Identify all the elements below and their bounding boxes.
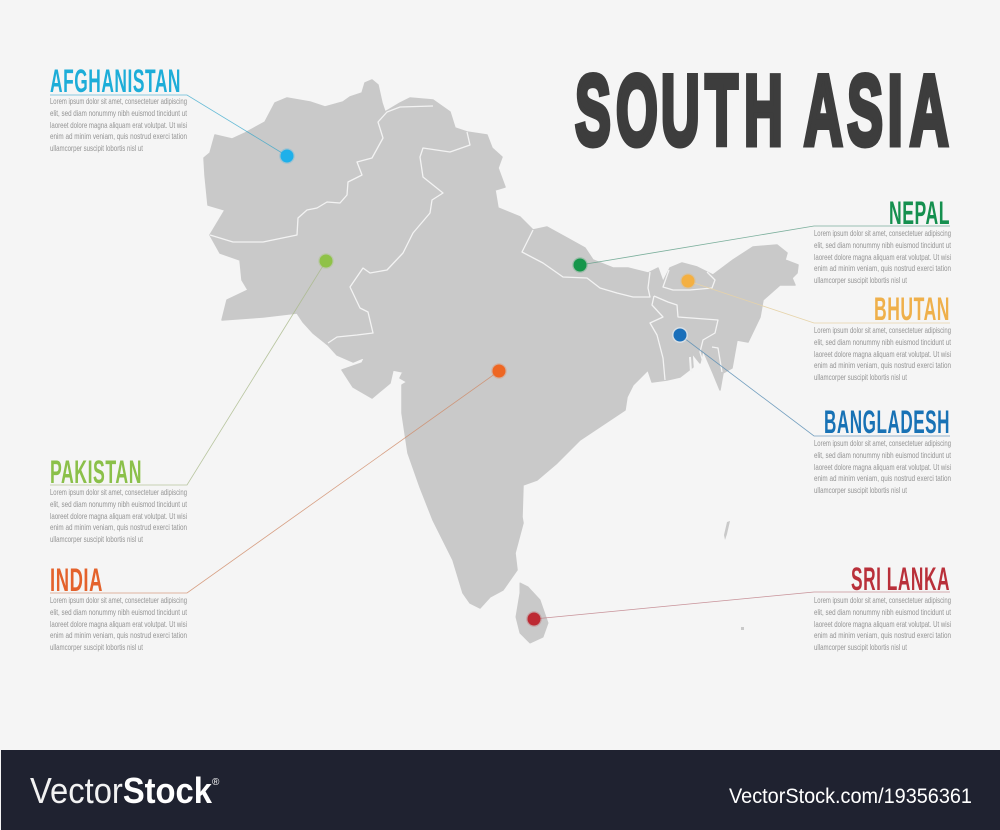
callout: Pakistan: Lorem ipsum dolor sit amet, consectetuer adipiscing: [50, 487, 187, 497]
footer logo: VectorStock: [30, 770, 213, 811]
island: Sri Lanka: [516, 583, 548, 643]
callout: India: ullamcorper suscipit lobortis nisl ut: [50, 642, 143, 652]
callout: Nepal: ullamcorper suscipit lobortis nisl ut: [814, 275, 907, 285]
callout: Nepal: enim ad minim veniam, quis nostrud exerci tation: [814, 263, 951, 273]
callout: Afghanistan: elit, sed diam nonummy nibh euismod tincidunt ut: [50, 108, 187, 118]
callout: Pakistan: PAKISTAN: [50, 454, 142, 490]
callout: India: [50, 364, 506, 652]
callout: Afghanistan: ullamcorper suscipit lobortis nisl ut: [50, 143, 143, 153]
callout: India: elit, sed diam nonummy nibh euismod tincidunt ut: [50, 607, 187, 617]
callout: Bhutan: enim ad minim veniam, quis nostrud exerci tation: [814, 360, 951, 370]
callout: Bhutan: ullamcorper suscipit lobortis nisl ut: [814, 372, 907, 382]
callout: Afghanistan: [50, 63, 294, 162]
registered mark: ®: [212, 777, 220, 788]
callout: Sri Lanka: [528, 561, 951, 652]
callout: Afghanistan: AFGHANISTAN: [50, 63, 181, 99]
islands: [724, 521, 744, 630]
callout: Afghanistan: enim ad minim veniam, quis nostrud exerci tation: [50, 131, 187, 141]
callout: Pakistan: [50, 254, 332, 544]
title: SOUTH ASIA: [575, 55, 949, 166]
callout: Nepal: [574, 195, 951, 285]
callout: India: enim ad minim veniam, quis nostrud exerci tation: [50, 630, 187, 640]
callout: Sri Lanka: ullamcorper suscipit lobortis nisl ut: [814, 642, 907, 652]
callout: Pakistan: enim ad minim veniam, quis nostrud exerci tation: [50, 522, 187, 532]
callout: Pakistan: laoreet dolore magna aliquam erat volutpat. Ut wisi: [50, 511, 187, 521]
callout: India: Lorem ipsum dolor sit amet, consectetuer adipiscing: [50, 595, 187, 605]
callout: Sri Lanka: elit, sed diam nonummy nibh euismod tincidunt ut: [814, 607, 951, 617]
footer bar: [1, 750, 1000, 830]
footer image id: VectorStock.com/19356361: [729, 785, 972, 808]
callout: Bangladesh: enim ad minim veniam, quis nostrud exerci tation: [814, 473, 951, 483]
callout: Bangladesh: [672, 327, 951, 495]
callout: Afghanistan: laoreet dolore magna aliquam erat volutpat. Ut wisi: [50, 120, 187, 130]
country borders: [210, 106, 722, 380]
callout: Nepal: elit, sed diam nonummy nibh euismod tincidunt ut: [814, 240, 951, 250]
callout: Bhutan: [682, 274, 951, 382]
callout: India: laoreet dolore magna aliquam erat volutpat. Ut wisi: [50, 619, 187, 629]
callout: Sri Lanka: enim ad minim veniam, quis nostrud exerci tation: [814, 630, 951, 640]
callout: Afghanistan: Lorem ipsum dolor sit amet, consectetuer adipiscing: [50, 96, 187, 106]
callout: Bhutan: elit, sed diam nonummy nibh euismod tincidunt ut: [814, 337, 951, 347]
callout: Pakistan: elit, sed diam nonummy nibh euismod tincidunt ut: [50, 499, 187, 509]
map of South Asia: [204, 80, 798, 643]
callout: Nepal: NEPAL: [889, 195, 950, 231]
callout: Bangladesh: elit, sed diam nonummy nibh euismod tincidunt ut: [814, 450, 951, 460]
callout: Bangladesh: ullamcorper suscipit lobortis nisl ut: [814, 485, 907, 495]
callout: India: INDIA: [50, 562, 103, 598]
callout: Pakistan: ullamcorper suscipit lobortis nisl ut: [50, 534, 143, 544]
